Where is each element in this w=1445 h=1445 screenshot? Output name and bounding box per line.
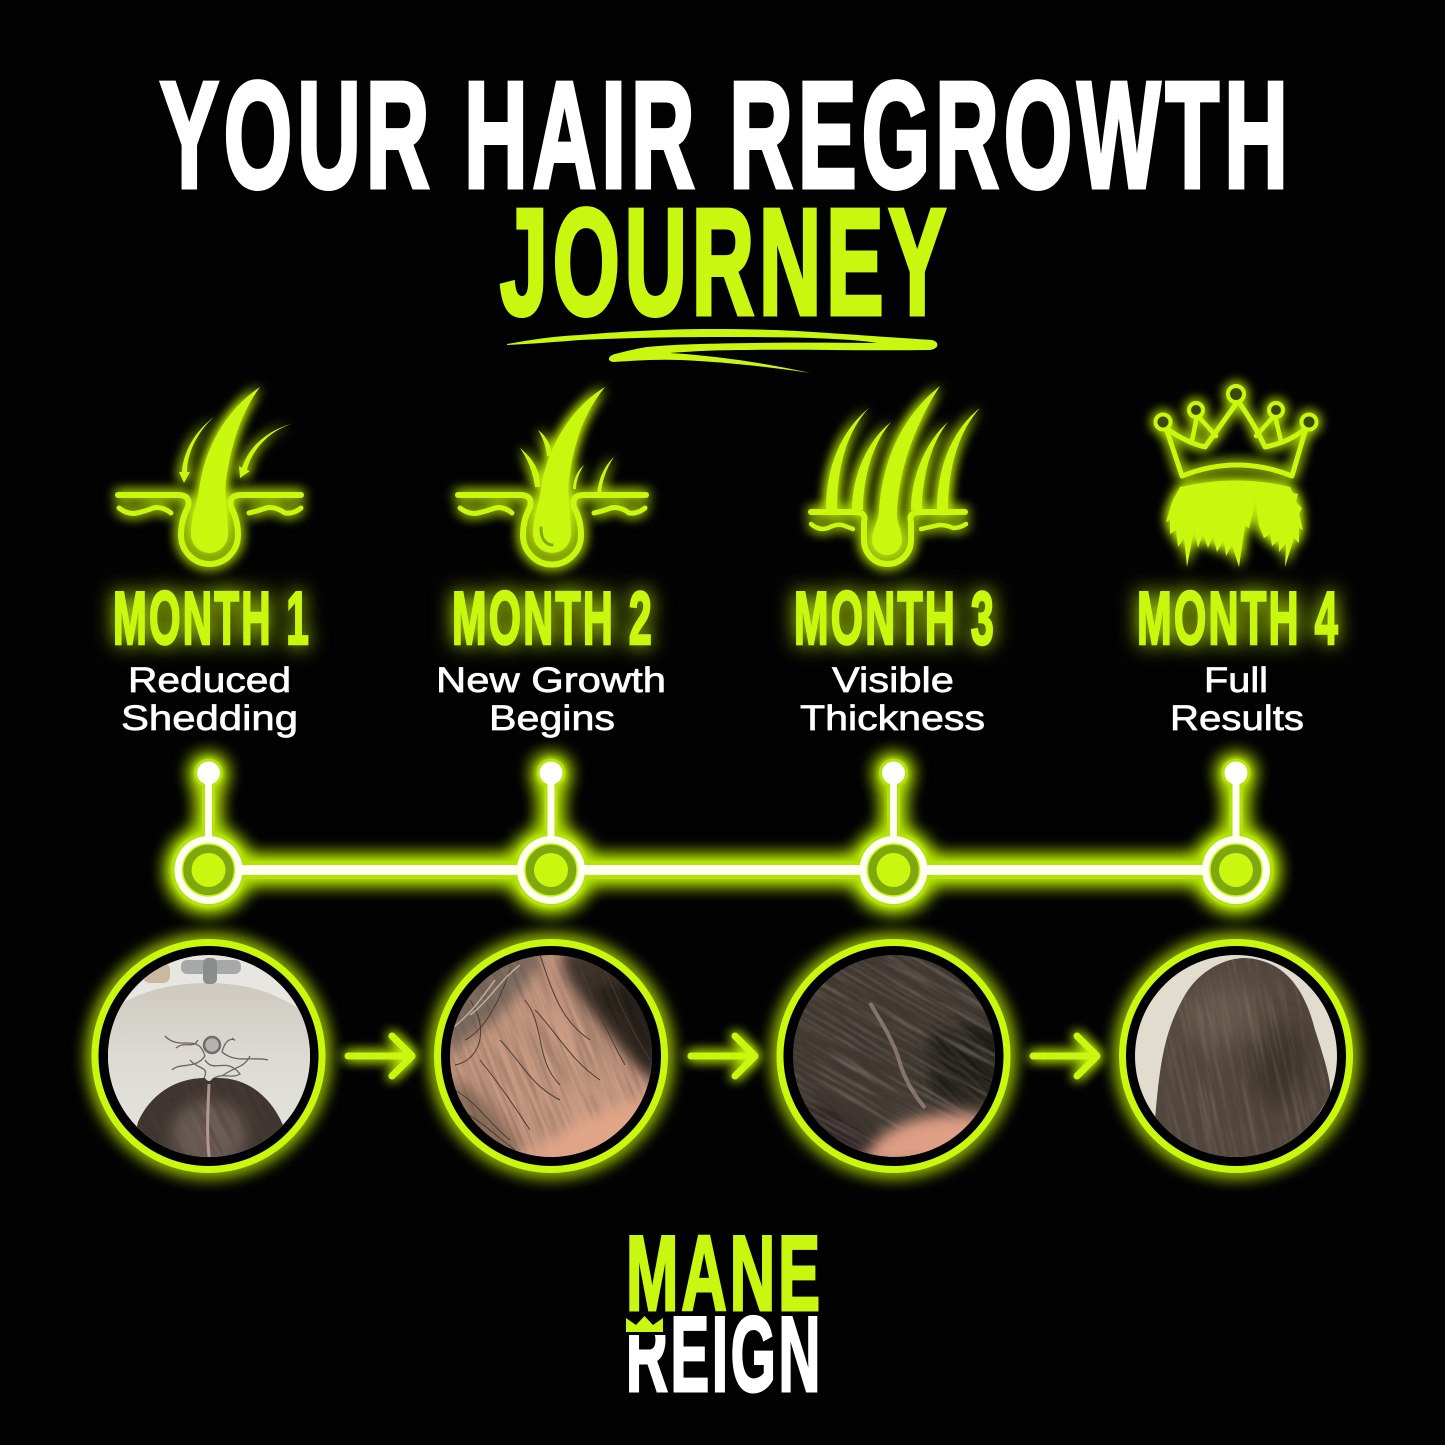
photo 3: visible thickness (760, 922, 1027, 1190)
logo word REIGN: REIGN (626, 1294, 823, 1414)
logo crown (622, 1314, 666, 1335)
node 1 (174, 762, 242, 904)
description (800, 661, 985, 738)
arrow 1 (348, 1036, 412, 1076)
description: Shedding (121, 699, 298, 738)
arrow 2 (691, 1036, 755, 1076)
node 2 (517, 762, 585, 904)
step: month 4 (1137, 576, 1340, 738)
logo word MANE: MANE (626, 1213, 823, 1333)
node 4 (1202, 762, 1270, 904)
title (160, 50, 1293, 346)
description: Full (1204, 661, 1268, 700)
title line 2: JOURNEY (500, 177, 951, 346)
month label: MONTH 1 (113, 576, 311, 660)
month label: MONTH 3 (794, 576, 996, 660)
description: New Growth (436, 661, 666, 700)
logo (622, 1213, 823, 1414)
photo 2: early regrowth scalp (418, 922, 684, 1190)
description (1170, 661, 1304, 738)
icon: month 3 thick hairs (811, 386, 980, 564)
step: month 1 (113, 576, 311, 738)
icon: month 4 crown and hair (1156, 386, 1316, 567)
step: month 3 (794, 576, 996, 738)
timeline (171, 758, 1274, 908)
icon: month 1 follicle (118, 387, 301, 564)
arrow 3 (1033, 1036, 1097, 1076)
photo 1: sink with shed hair (74, 922, 342, 1190)
description: Reduced (128, 661, 291, 700)
step: month 2 (436, 576, 666, 738)
crown (1156, 386, 1316, 476)
timeline glow shapes (171, 758, 1274, 908)
description: Visible (832, 661, 954, 700)
description: Results (1170, 699, 1304, 738)
hair (1166, 480, 1303, 567)
icon: month 2 follicle with new hairs (458, 387, 646, 565)
timeline line (208, 865, 1236, 875)
underline swoosh (507, 329, 937, 373)
description: Begins (489, 699, 615, 738)
node 3 (860, 762, 928, 904)
description (436, 661, 666, 738)
description (121, 661, 298, 738)
photo 4: full results (1102, 922, 1370, 1190)
month label: MONTH 2 (452, 576, 654, 660)
description: Thickness (800, 699, 985, 738)
